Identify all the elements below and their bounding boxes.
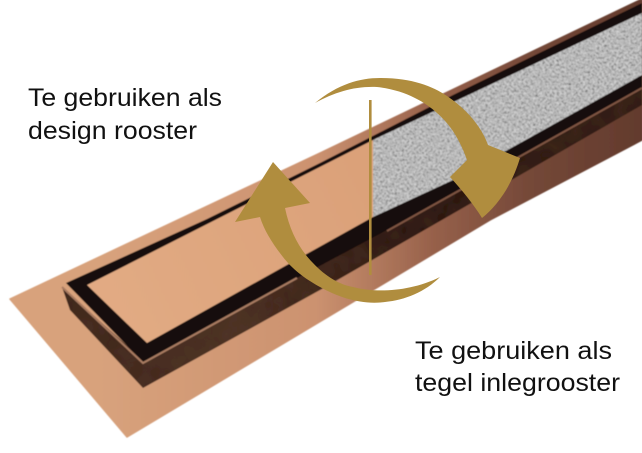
label: design rooster line 2: design rooster bbox=[28, 117, 197, 145]
dark channel bbox=[66, 3, 642, 362]
label: design rooster: Te gebruiken als bbox=[28, 84, 222, 112]
front rim bbox=[62, 278, 297, 363]
tile inlay grate bbox=[373, 13, 642, 217]
arrow: rotate to tile side bbox=[315, 78, 520, 218]
drain channel wall bbox=[62, 80, 642, 388]
rotation arrows bbox=[235, 78, 520, 303]
rotation axis line bbox=[369, 100, 372, 275]
far rim bbox=[387, 88, 642, 231]
copper design grate bbox=[87, 140, 373, 343]
arrow: rotate to design side bbox=[235, 162, 440, 303]
label: tegel inlegrooster: Te gebruiken als bbox=[415, 337, 612, 365]
label: tegel inlegrooster line 2: tegel inlegrooster bbox=[415, 369, 620, 397]
